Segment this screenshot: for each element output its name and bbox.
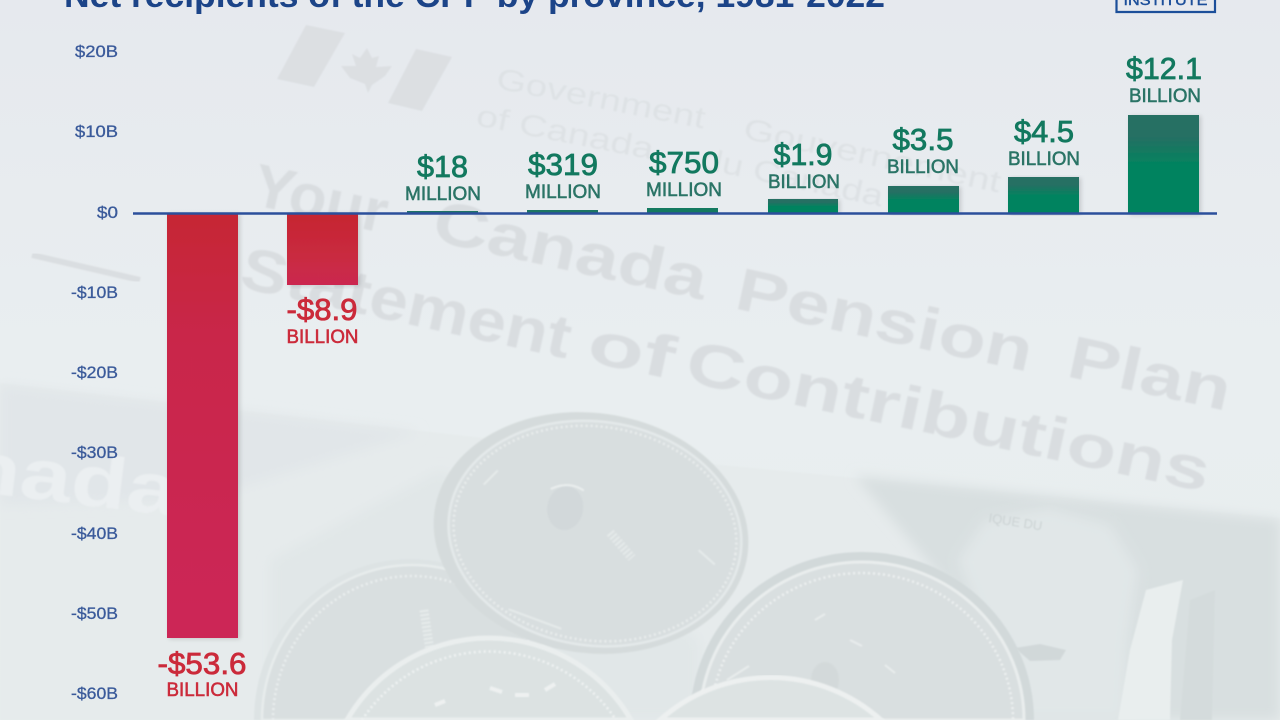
y axis labels: $20B [75,42,118,61]
bar: 18 million: MILLION [405,184,481,205]
bar: 750 million [646,145,722,214]
bar: 4.5 billion [1008,114,1080,214]
bar: 3.5 billion [887,122,959,214]
bar: 750 million: $750 [649,145,719,180]
statement heading line 1: Your [247,151,394,246]
statement small headers: du Canada [699,143,887,213]
y axis labels [71,42,118,703]
bar: 4.5 billion: BILLION [1008,149,1080,170]
coin back right [690,552,1034,720]
y axis labels: -$30B [71,443,118,462]
coin back centre [418,392,764,674]
y axis labels: -$50B [71,604,118,623]
statement heading line 1: Pension [730,255,1040,385]
y axis labels: -$40B [71,524,118,543]
bar: 319 million: MILLION [525,182,601,203]
bar: 4.5 billion: $4.5 [1014,114,1074,149]
bar chart [133,51,1217,701]
logo: institute [1116,0,1215,12]
bar: 3.5 billion: $3.5 [892,122,954,157]
bar: -53.6 billion [158,213,246,701]
statement heading line 2: of [582,308,683,392]
y axis labels: $10B [75,122,118,141]
banknote portrait: IQUE DU [988,510,1043,533]
statement small headers: of Canada [474,99,657,166]
bar: 12.1 billion [1126,51,1202,214]
bar: 12.1 billion: BILLION [1129,86,1201,107]
bar: -53.6 billion: BILLION [166,680,238,701]
bar: -53.6 billion: -$53.6 [158,646,246,681]
statement heading line 1: Plan [1062,323,1238,424]
statement heading line 1: Canada [427,187,715,313]
statement heading line 1 [247,151,1238,424]
bar: 12.1 billion: $12.1 [1126,51,1202,86]
bar: 1.9 billion: $1.9 [774,137,832,172]
statement small headers: Gouvernement [741,113,1005,199]
statement heading line 2: Contributions [680,328,1217,505]
statement small headers [474,62,1005,213]
bar: -8.9 billion: BILLION [286,327,358,348]
statement edge mark [32,255,140,280]
bar: 3.5 billion: BILLION [887,157,959,178]
banknote [0,383,1280,720]
bar: 319 million: $319 [528,147,598,182]
coin front right [660,678,881,720]
coin front left [347,638,631,720]
statement heading line 2 [235,234,1217,505]
y axis labels: $0 [97,203,118,222]
statement heading line 2: Statement [235,234,578,371]
statement flag logo [277,25,452,111]
y axis labels: -$20B [71,363,118,382]
bar: -8.9 billion [286,213,358,348]
bar: 1.9 billion [768,137,840,214]
zero axis line [133,212,1217,215]
coin back left [254,559,566,720]
y axis labels: -$60B [71,684,118,703]
bar: -8.9 billion: -$8.9 [286,292,358,327]
y axis labels: -$10B [71,283,118,302]
statement small headers: Government [494,62,709,135]
bar: 1.9 billion: BILLION [768,172,840,193]
bar: 18 million: $18 [417,149,468,184]
banknote portrait [958,508,1215,720]
bar: 18 million [405,149,481,214]
bar: 750 million: MILLION [646,180,722,201]
bar: 319 million [525,147,601,214]
